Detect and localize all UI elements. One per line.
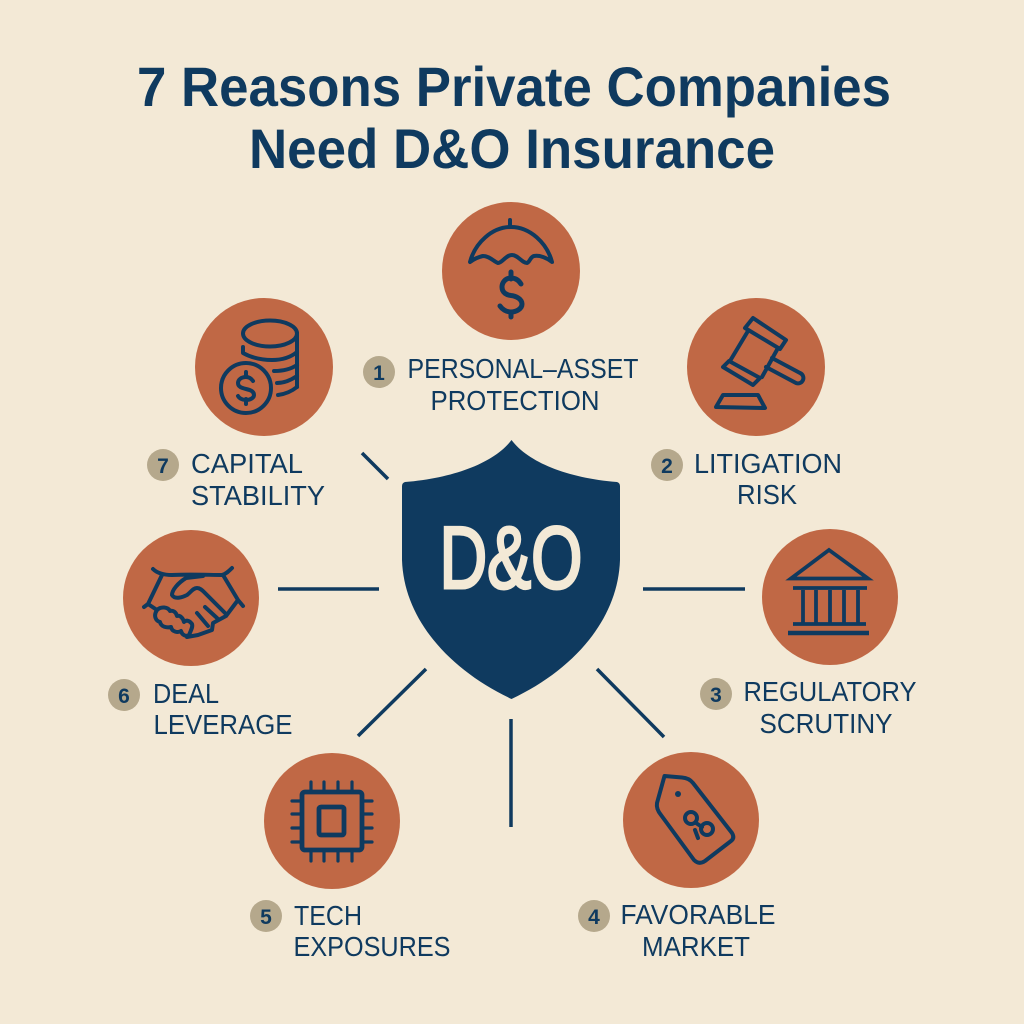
item 3: regulatory scrutiny: SCRUTINY	[760, 708, 893, 739]
title: 7 Reasons Private Companies	[137, 55, 891, 118]
item 6: deal leverage: DEAL	[153, 678, 219, 709]
icon: tag hole	[675, 791, 681, 797]
item 4: favorable market	[578, 752, 776, 962]
icon: institution building	[788, 550, 869, 633]
item 7: capital stability	[147, 298, 333, 511]
item 4: favorable market: MARKET	[642, 931, 750, 962]
title: Need D&O Insurance	[249, 117, 775, 180]
item 3: regulatory scrutiny: 3	[710, 684, 722, 707]
item 5: tech exposures: 5	[260, 906, 272, 929]
icon: microchip	[292, 782, 372, 861]
icon: coins	[221, 320, 297, 413]
icon: handshake	[144, 568, 243, 637]
item 6: deal leverage: 6	[118, 685, 130, 708]
item 5: tech exposures: TECH	[294, 900, 362, 931]
icon: price tag	[657, 776, 733, 863]
central shield	[402, 440, 620, 699]
item 2: litigation risk: LITIGATION	[694, 448, 842, 479]
item 6: deal leverage	[108, 530, 292, 740]
item 1: personal-asset protection: PROTECTION	[430, 385, 600, 416]
item 4: favorable market: 4	[588, 906, 600, 929]
item 7: capital stability: CAPITAL	[191, 448, 303, 479]
central shield: D&O	[440, 508, 582, 607]
title	[137, 55, 891, 180]
item 5: tech exposures	[250, 753, 450, 962]
item 3: regulatory scrutiny	[700, 529, 917, 739]
item 1: personal-asset protection: PERSONAL–ASSET	[408, 353, 638, 384]
item 4: favorable market: FAVORABLE	[620, 899, 776, 930]
item 2: litigation risk: 2	[661, 455, 673, 478]
item 7: capital stability: 7	[157, 455, 169, 478]
connector lines	[278, 453, 745, 827]
item 2: litigation risk	[651, 298, 842, 510]
item 5: tech exposures: EXPOSURES	[294, 931, 450, 962]
icon: umbrella with dollar	[470, 220, 552, 317]
item 3: regulatory scrutiny: REGULATORY	[744, 676, 917, 707]
icon: gavel	[716, 318, 803, 408]
item 7: capital stability: STABILITY	[191, 480, 325, 511]
item 2: litigation risk: RISK	[737, 479, 797, 510]
item 1: personal-asset protection	[363, 202, 638, 416]
item 1: personal-asset protection: 1	[373, 362, 385, 385]
item 6: deal leverage: LEVERAGE	[154, 709, 292, 740]
